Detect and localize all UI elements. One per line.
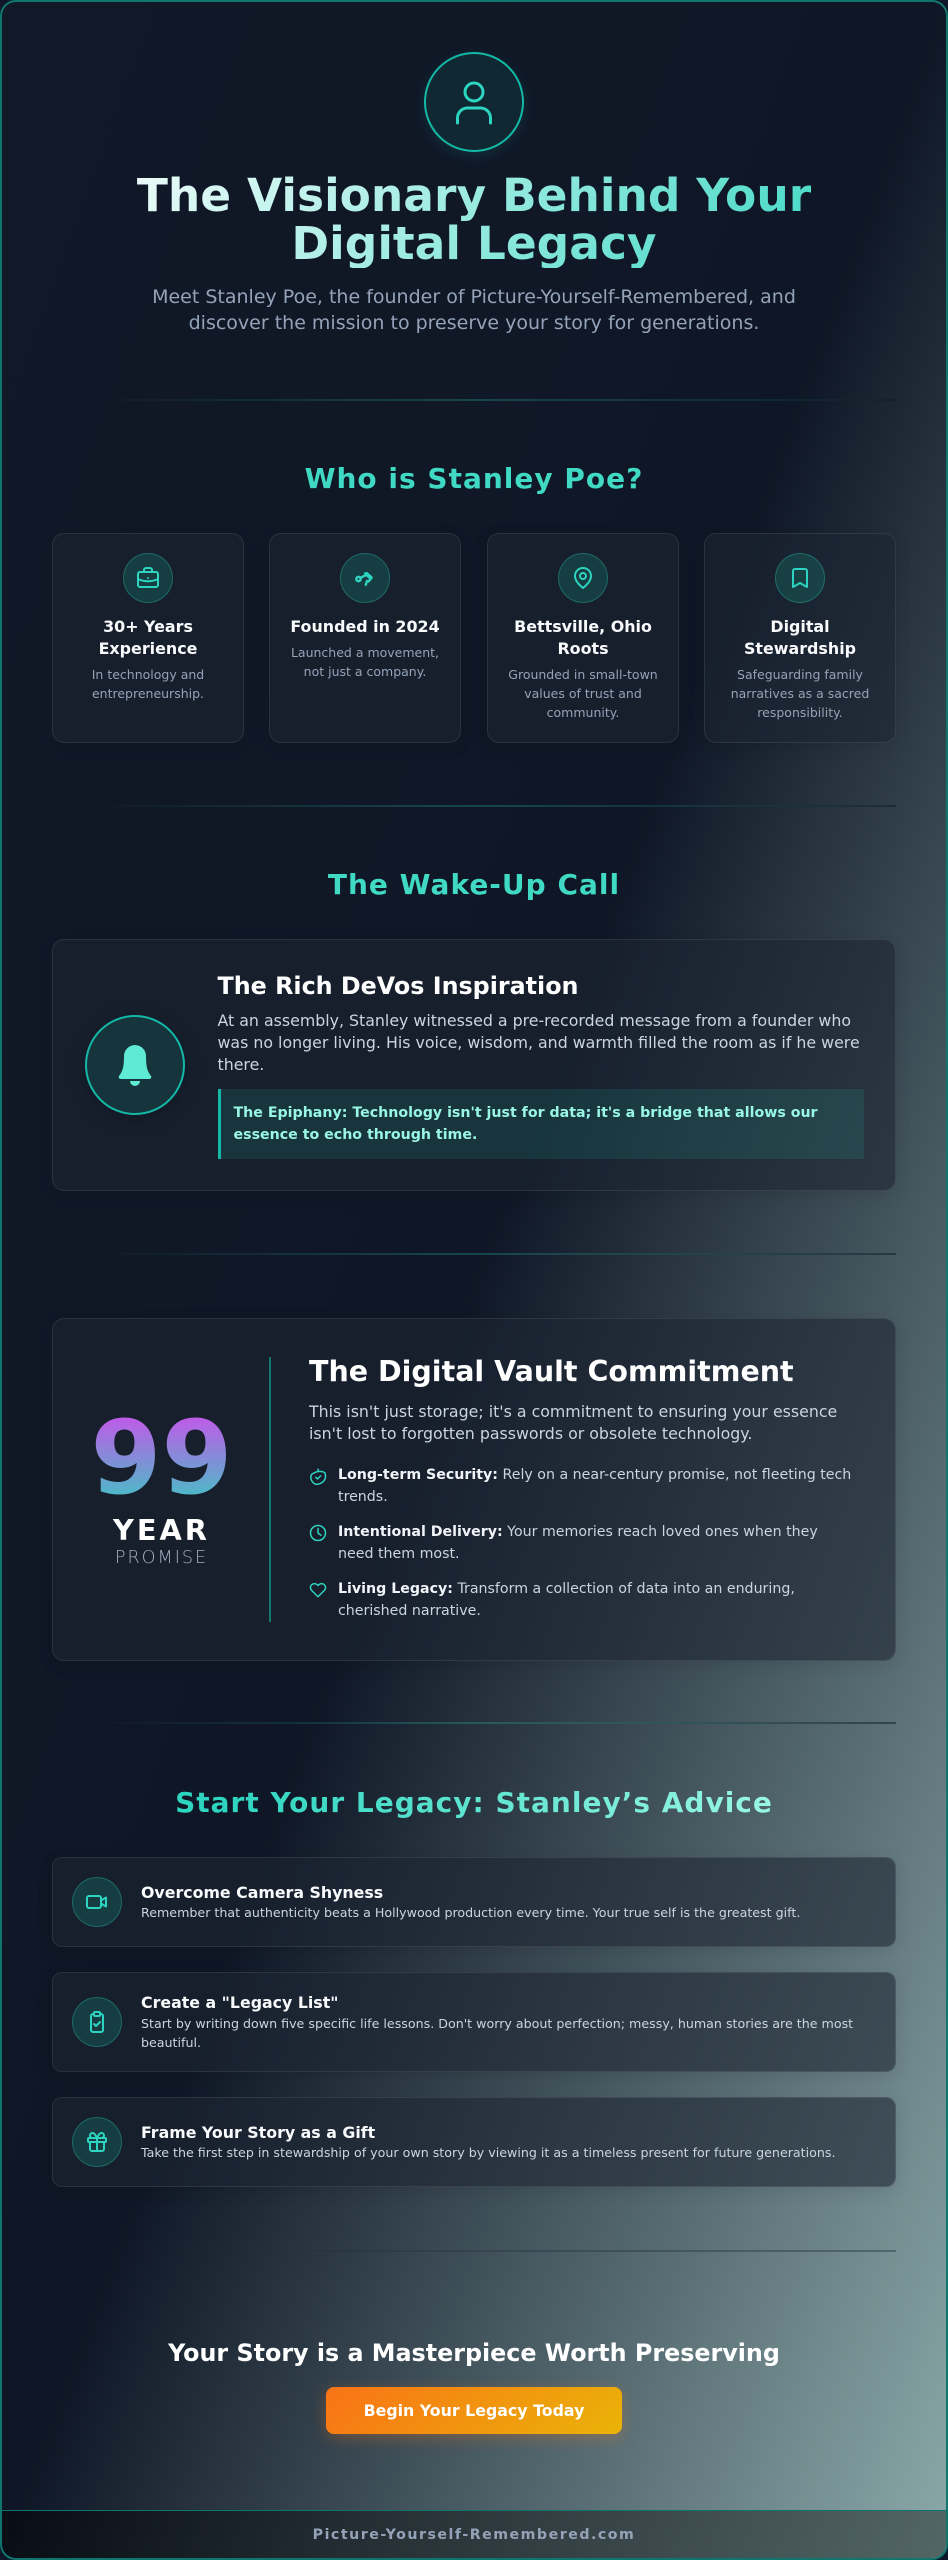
icon: briefcase (123, 553, 173, 603)
footer (0, 2510, 948, 2560)
heading: who is stanley poe: Who is Stanley Poe? (305, 462, 643, 495)
panel: digital vault card (52, 1318, 896, 1661)
stat: 99 year promise (91, 1399, 232, 1568)
panel: roots card (487, 533, 679, 743)
advice text: Remember that authenticity beats a Hollywood production every time. Your true self is the greatest gift. (141, 1905, 800, 1920)
list item: delivery (338, 1524, 818, 1562)
icon: shield check (310, 1468, 326, 1486)
title: The Visionary Behind Your (137, 169, 811, 222)
icon: clock (310, 1524, 326, 1542)
card title (514, 617, 652, 658)
panel: advice gift (52, 2097, 896, 2187)
heading: start your legacy: Start Your Legacy: Stanley’s Advice (175, 1786, 773, 1819)
list item: delivery: Intentional Delivery: Your memories reach loved ones when they (338, 1524, 818, 1540)
icon: map pin (558, 553, 608, 603)
card description (291, 645, 439, 679)
card description: values of trust and (524, 686, 642, 701)
callout: epiphany (218, 1089, 864, 1159)
subtitle: Meet Stanley Poe, the founder of Picture-Yourself-Remembered, and (152, 286, 796, 308)
subtitle (152, 286, 796, 334)
card heading: The Rich DeVos Inspiration (218, 972, 578, 1000)
card title: Experience (99, 639, 197, 658)
title (52, 172, 896, 268)
list item: delivery: need them most. (338, 1546, 460, 1562)
icon: heart (310, 1582, 326, 1598)
callout: epiphany: essence to echo through time. (234, 1127, 477, 1143)
icon: bell (85, 1015, 185, 1115)
list item: security: trends. (338, 1489, 388, 1505)
card paragraph: was no longer living. His voice, wisdom, and warmth filled the room as if he were (218, 1033, 860, 1052)
vault paragraph (308, 1402, 837, 1443)
panel: advice camera (52, 1857, 896, 1947)
card description: Grounded in small-town (508, 667, 658, 682)
card paragraph: there. (218, 1055, 264, 1074)
subtitle: discover the mission to preserve your story for generations. (189, 312, 759, 334)
list item: legacy: Living Legacy: Transform a collection of data into an enduring, (338, 1581, 795, 1597)
card title: Bettsville, Ohio (514, 617, 652, 636)
icon: gift (72, 2117, 122, 2167)
card description: Safeguarding family (737, 667, 863, 682)
advice text: Start by writing down five specific life lessons. Don't worry about perfection; messy, human stories are the most (141, 2016, 853, 2031)
card title (99, 617, 197, 658)
icon: video (72, 1877, 122, 1927)
big number (53, 1399, 270, 1519)
icon: bookmark (775, 553, 825, 603)
header icon: person (424, 52, 524, 152)
button: begin your legacy: Begin Your Legacy Today (364, 2401, 584, 2420)
card paragraph (218, 1011, 860, 1074)
card title: Stewardship (744, 639, 856, 658)
year label: YEAR (113, 1513, 210, 1547)
heading: wake-up call: The Wake-Up Call (328, 868, 620, 901)
card title: Digital (770, 617, 830, 636)
card title (744, 617, 856, 658)
advice text: beautiful. (141, 2035, 201, 2050)
footer: Picture-Yourself-Remembered.com (313, 2527, 635, 2543)
card description: community. (547, 705, 619, 720)
panel: advice list (52, 1972, 896, 2072)
card description: not just a company. (304, 664, 426, 679)
vault paragraph: isn't lost to forgotten passwords or obsolete technology. (309, 1424, 752, 1443)
card paragraph: At an assembly, Stanley witnessed a pre-recorded message from a founder who (218, 1011, 851, 1030)
big number: 99 (91, 1399, 232, 1518)
icon: clipboard check (72, 1997, 122, 2047)
panel: founded card (269, 533, 461, 743)
list item: security (338, 1467, 851, 1505)
card title: Roots (557, 639, 609, 658)
card title: Founded in 2024 (290, 617, 440, 636)
icon: rocket (340, 553, 390, 603)
advice title: Create a "Legacy List" (141, 1993, 338, 2012)
advice title: Overcome Camera Shyness (141, 1883, 383, 1902)
card description: narratives as a sacred (731, 686, 869, 701)
advice text (141, 2016, 853, 2050)
title: Digital Legacy (291, 217, 657, 270)
card description (731, 667, 869, 720)
card description: Launched a movement, (291, 645, 439, 660)
promise label: PROMISE (115, 1548, 208, 1568)
button: begin your legacy (326, 2387, 622, 2434)
panel: experience card (52, 533, 244, 743)
panel: stewardship card (704, 533, 896, 743)
card description (508, 667, 658, 720)
heading: start your legacy (52, 1785, 896, 1821)
advice text: Take the first step in stewardship of your own story by viewing it as a timeless present for future generations. (141, 2145, 836, 2160)
card description: responsibility. (757, 705, 843, 720)
panel: wake-up card (52, 939, 896, 1191)
callout: epiphany: The Epiphany: Technology isn't just for data; it's a bridge that allows our (234, 1105, 818, 1121)
list item: legacy (338, 1581, 795, 1619)
vertical rule (269, 1357, 271, 1622)
list item: legacy: cherished narrative. (338, 1603, 481, 1619)
card description: entrepreneurship. (92, 686, 204, 701)
vault heading: The Digital Vault Commitment (309, 1355, 794, 1388)
list item: security: Long-term Security: Rely on a near-century promise, not fleeting tech (338, 1467, 851, 1483)
card description: In technology and (92, 667, 204, 682)
advice title: Frame Your Story as a Gift (141, 2123, 375, 2142)
card description (92, 667, 204, 701)
vault paragraph: This isn't just storage; it's a commitment to ensuring your essence (309, 1402, 837, 1421)
card title: 30+ Years (103, 617, 193, 636)
call to action heading: Your Story is a Masterpiece Worth Preserving (168, 2339, 780, 2367)
